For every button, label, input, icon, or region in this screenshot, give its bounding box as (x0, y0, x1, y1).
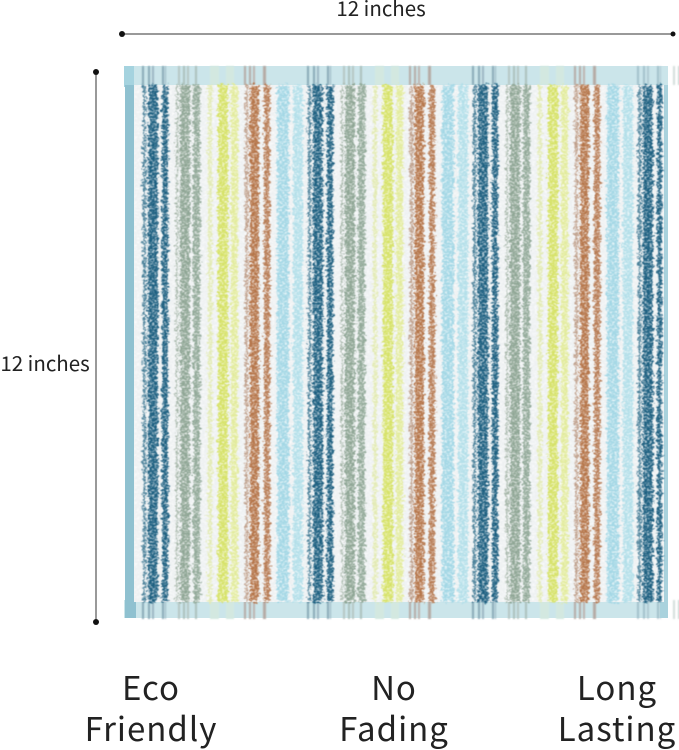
width dimension: 12 inches (119, 0, 676, 37)
label: No Fading: Fading (339, 703, 449, 750)
towel right hem (660, 85, 668, 618)
label: No Fading: No (371, 662, 417, 710)
towel terry pile with repeating stripes (134, 85, 664, 602)
label: Long Lasting: Long (577, 662, 657, 710)
height dimension: 12 inches: 12 inches (0, 347, 90, 377)
towel left hem (125, 85, 136, 618)
label: Eco Friendly (85, 662, 217, 750)
height dimension: 12 inches (0, 69, 99, 625)
label: Long Lasting (558, 662, 676, 750)
label: Long Lasting: Lasting (558, 703, 676, 750)
label: Eco Friendly: Eco (122, 662, 180, 710)
label: Eco Friendly: Friendly (85, 703, 217, 750)
label: No Fading (339, 662, 449, 750)
towel bottom hem (124, 600, 679, 619)
striped towel (124, 66, 679, 619)
towel top hem (124, 66, 679, 87)
